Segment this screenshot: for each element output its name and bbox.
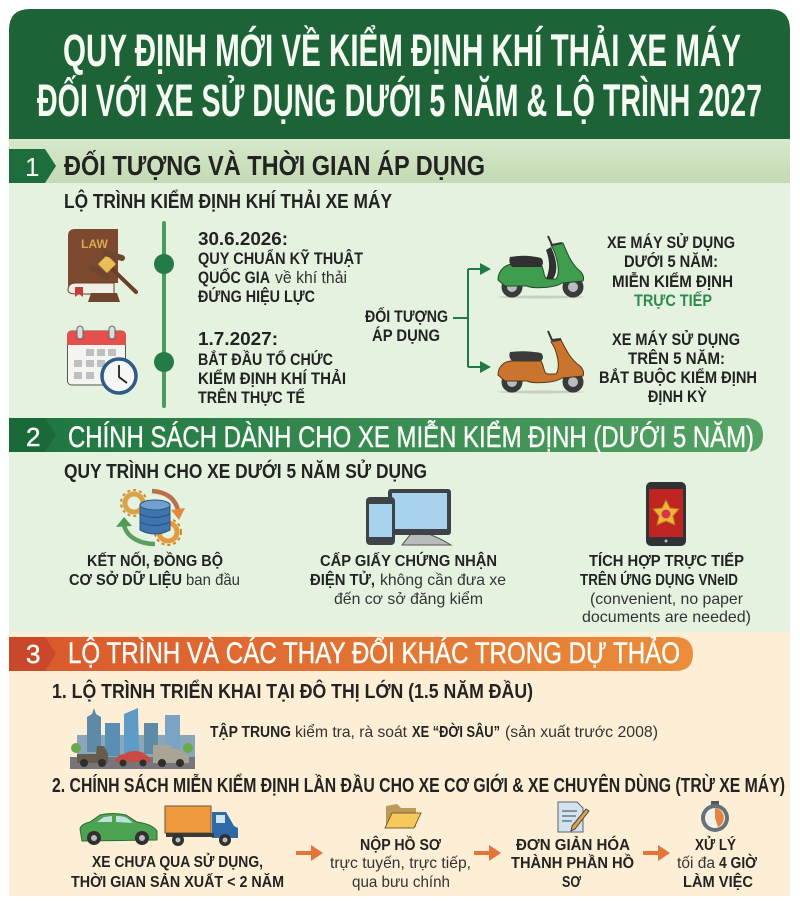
milestone: 30.6.2026: về khí thải (275, 269, 347, 287)
section 1 header (9, 139, 790, 183)
text: over 5 years (599, 330, 757, 406)
section 1 header: ĐỐI TƯỢNG VÀ THỜI GIAN ÁP DỤNG (64, 149, 485, 181)
step: processing time: tối đa (677, 855, 715, 872)
section 2 panel (9, 418, 763, 626)
step: electronic certificate: không cần đưa xe (380, 572, 506, 589)
step: VNeID: (convenient, no paper (590, 591, 744, 608)
milestone: 30.6.2026: ĐỨNG HIỆU LỰC (198, 287, 315, 306)
text: new vehicle criteria: THỜI GIAN SẢN XUẤT < 2 NĂM (71, 872, 284, 891)
step: VNeID: TÍCH HỢP TRỰC TIẾP (589, 551, 744, 570)
text: new vehicle criteria: XE CHƯA QUA SỬ DỤNG, (92, 852, 263, 871)
arrow: to simplification (474, 845, 501, 861)
text: focus on old vehicles: kiểm tra, rà soát (295, 723, 408, 741)
icon: law book and gavel: LAW (81, 239, 108, 251)
step: connect data: ban đầu (186, 572, 240, 589)
text: focus on old vehicles: TẬP TRUNG (210, 722, 291, 741)
icon: delivery truck (165, 806, 238, 846)
text: focus on old vehicles (210, 722, 658, 741)
step: processing time: LÀM VIỆC (683, 872, 753, 891)
icon: database sync with gears (116, 490, 185, 545)
step: VNeID: TRÊN ỨNG DỤNG VNeID (580, 570, 738, 589)
subheading: roadmap: LỘ TRÌNH KIỂM ĐỊNH KHÍ THẢI XE MÁY (64, 189, 393, 213)
milestone: 1.7.2027: KIỂM ĐỊNH KHÍ THẢI (198, 369, 346, 388)
step: submit documents: trực tuyến, trực tiếp, (330, 855, 471, 872)
timeline (154, 221, 174, 408)
step: electronic certificate: ĐIỆN TỬ, (310, 570, 375, 589)
milestone: 30.6.2026: 30.6.2026: (198, 229, 288, 249)
step: processing time: 4 GIỜ (719, 853, 757, 872)
label: applicable subjects (365, 306, 448, 345)
section 3 panel (9, 636, 785, 891)
text: under 5 years: TRỰC TIẾP (634, 291, 712, 310)
subheading: urban roadmap: 1. LỘ TRÌNH TRIỂN KHAI TẠI ĐÔ THỊ LỚN (1.5 NĂM ĐẦU) (52, 679, 533, 703)
section 3 header: 3 (26, 639, 40, 669)
section 1 header: 1 (25, 152, 39, 182)
section 2 header: 2 (26, 422, 40, 452)
step: connect data: KẾT NỐI, ĐỒNG BỘ (87, 550, 223, 570)
icon: document and pencil (558, 802, 589, 832)
step: electronic certificate (310, 551, 506, 608)
text: under 5 years: DƯỚI 5 NĂM: (624, 252, 718, 271)
icon: green scooter (498, 236, 584, 298)
text: over 5 years: TRÊN 5 NĂM: (628, 349, 725, 368)
icon: phone and desktop (366, 489, 451, 545)
label: applicable subjects: ĐỐI TƯỢNG (365, 306, 448, 326)
icon: stopwatch (701, 801, 729, 832)
text: over 5 years: BẮT BUỘC KIỂM ĐỊNH (599, 368, 757, 387)
step: simplify paperwork: SƠ (562, 874, 581, 891)
arrow: to submission (296, 845, 323, 861)
text: under 5 years (607, 233, 735, 310)
milestone: 30.6.2026 (198, 229, 363, 306)
step: processing time: XỬ LÝ (695, 835, 736, 854)
step: simplify paperwork: ĐƠN GIẢN HÓA (516, 835, 630, 854)
icon: smartphone with VNeID emblem (646, 482, 686, 546)
icon: orange scooter (498, 331, 584, 394)
step: submit documents: NỘP HỒ SƠ (360, 835, 441, 854)
text: under 5 years: MIỄN KIỂM ĐỊNH (612, 272, 733, 291)
step: simplify paperwork: THÀNH PHẦN HỒ (511, 853, 634, 872)
arrow: branch to both vehicle groups (453, 263, 491, 373)
step: submit documents: qua bưu chính (352, 874, 450, 891)
milestone: 1.7.2027: BẮT ĐẦU TỔ CHỨC (198, 350, 333, 369)
icon: law book and gavel (68, 229, 136, 302)
milestone: 1.7.2027 (198, 329, 346, 407)
step: simplify paperwork (511, 835, 634, 891)
icon: calendar and clock (67, 326, 136, 393)
text: focus on old vehicles: (sản xuất trước 2008) (505, 724, 658, 741)
step: connect data: CƠ SỞ DỮ LIỆU (69, 569, 182, 589)
subheading: process: QUY TRÌNH CHO XE DƯỚI 5 NĂM SỬ DỤNG (64, 459, 427, 483)
step: VNeID: documents are needed) (582, 609, 751, 626)
step: processing time (677, 835, 757, 891)
text: new vehicle criteria (71, 852, 284, 891)
text: over 5 years: XE MÁY SỬ DỤNG (612, 330, 740, 349)
text: under 5 years: XE MÁY SỬ DỤNG (607, 233, 735, 252)
icon: city traffic (70, 708, 195, 769)
milestone: 1.7.2027: TRÊN THỰC TẾ (198, 388, 305, 407)
text: focus on old vehicles: XE “ĐỜI SÂU” (412, 722, 500, 741)
step: VNeID (580, 551, 751, 626)
step: connect data (69, 550, 240, 589)
title banner (9, 9, 790, 139)
icon: green car (80, 814, 157, 845)
icon: folder (385, 804, 421, 828)
step: submit documents (330, 835, 471, 891)
arrow: to processing (643, 845, 670, 861)
section 1 panel (9, 139, 790, 408)
label: applicable subjects: ÁP DỤNG (372, 326, 440, 345)
milestone: 30.6.2026: QUY CHUẨN KỸ THUẬT (198, 248, 363, 268)
step: electronic certificate: đến cơ sở đăng kiểm (334, 590, 483, 608)
milestone: 30.6.2026: QUỐC GIA (198, 267, 270, 287)
milestone: 1.7.2027: 1.7.2027: (198, 329, 278, 349)
text: over 5 years: ĐỊNH KỲ (648, 387, 707, 406)
step: electronic certificate: CẤP GIẤY CHỨNG NHẬN (320, 551, 497, 570)
